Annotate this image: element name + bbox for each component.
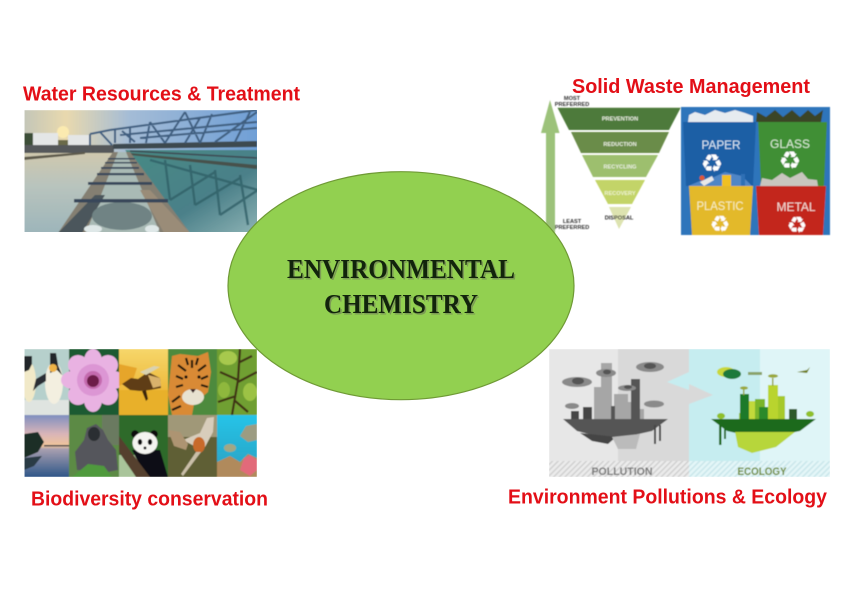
tile: tree [217, 349, 257, 415]
tile: honey bee [119, 349, 168, 415]
channel [58, 152, 190, 233]
center title: environmental chemistry: ENVIRONMENTAL [288, 256, 516, 286]
tile: dahlia flower [61, 349, 125, 415]
bin: plastic: ♻ [710, 212, 730, 238]
tile: panda [119, 415, 168, 477]
truss reflections [150, 160, 258, 225]
plastic items [688, 172, 752, 186]
tile: robin in flight [168, 415, 217, 477]
left water [24, 152, 112, 232]
waste hierarchy diagram: PREVENTION [602, 116, 638, 122]
central ellipse [228, 172, 574, 400]
tile: gorilla [69, 415, 119, 477]
heading: solid waste: Solid Waste Management [572, 76, 810, 98]
bin: metal [756, 186, 826, 239]
waste hierarchy diagram: MOST [564, 96, 581, 102]
divider wedges [667, 372, 689, 390]
waste hierarchy diagram: LEAST [563, 219, 582, 225]
bin: glass: GLASS [770, 137, 810, 151]
pyramid band: recovery [595, 180, 645, 204]
bridge deck and rails [113, 141, 257, 149]
storage tanks [33, 133, 89, 146]
polluted city island [562, 362, 668, 449]
bin: paper: ♻ [701, 149, 723, 178]
bin: metal: METAL [776, 202, 816, 214]
heading: water resources: Water Resources & Treatment [23, 84, 300, 106]
bin: glass: ♻ [779, 146, 801, 175]
bin: plastic [689, 186, 753, 238]
heading: pollution and ecology: Environment Pollutions & Ecology [508, 486, 828, 508]
metal cans [760, 172, 818, 186]
pyramid band: disposal [609, 207, 631, 229]
arrow: most to least preferred [541, 100, 560, 233]
tile: tiger [168, 349, 217, 415]
waste hierarchy diagram: RECOVERY [604, 191, 636, 197]
center title: environmental chemistry [287, 254, 516, 320]
center title: environmental chemistry: CHEMISTRY [324, 289, 478, 319]
waste hierarchy diagram: REDUCTION [603, 142, 637, 148]
tile: sea turtle and coral [217, 415, 257, 477]
right water [125, 150, 258, 233]
center title: environmental chemistry: CHEMISTRY [326, 290, 480, 320]
waste hierarchy diagram: PREFERRED [555, 102, 589, 108]
bin: plastic: PLASTIC [696, 201, 744, 213]
glass bottles [756, 110, 823, 122]
label: ecology: ECOLOGY [738, 466, 787, 478]
steel truss [90, 110, 257, 145]
recycling bins photo [681, 107, 830, 239]
cross bars [74, 158, 168, 202]
waste hierarchy diagram: PREFERRED [555, 225, 589, 231]
paper scraps [688, 110, 753, 122]
pyramid band: prevention [558, 108, 681, 130]
biodiversity photo grid [22, 349, 257, 477]
green city island [711, 367, 816, 453]
bin: paper [683, 122, 756, 186]
waste hierarchy diagram [541, 96, 681, 233]
bin: metal: ♻ [787, 213, 807, 239]
bin: glass [758, 122, 827, 186]
label: pollution: POLLUTION [592, 466, 653, 478]
tile: lake at dusk [24, 415, 69, 477]
tile: penguins [22, 349, 69, 415]
pollution vs ecology illustration [549, 349, 830, 478]
pyramid band: recycling [582, 155, 658, 177]
waste hierarchy diagram: RECYCLING [604, 164, 636, 170]
bin: paper: PAPER [702, 138, 741, 152]
photo: water treatment plant [24, 110, 258, 233]
heading: biodiversity: Biodiversity conservation [31, 488, 268, 510]
pyramid band: reduction [571, 132, 669, 153]
waste hierarchy diagram: DISPOSAL [605, 216, 634, 222]
center title: environmental chemistry: ENVIRONMENTAL [287, 254, 515, 284]
